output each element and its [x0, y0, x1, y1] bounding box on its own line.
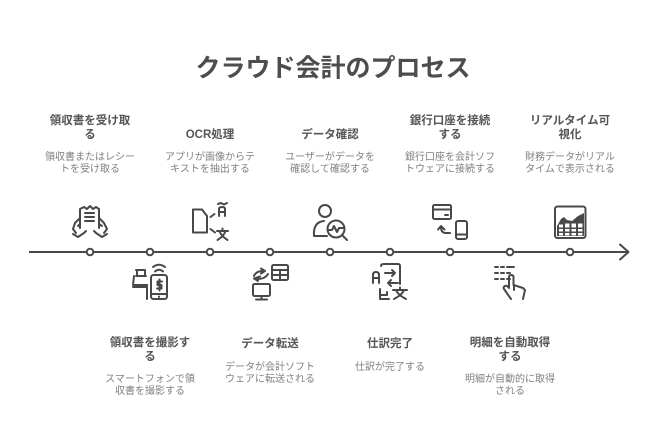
step 6 text: journal completed: 仕訳が完了する: [355, 360, 425, 373]
step 3 text: OCR: アプリが画像からテ: [165, 150, 255, 163]
step 2 text: photograph receipt: 領収書を撮影す: [110, 335, 190, 349]
step 7 text: connect bank account: [405, 113, 495, 175]
step 9 text: real-time visualization: タイムで表示される: [525, 163, 615, 175]
timeline arrow: [29, 244, 628, 260]
step 1 text: receive receipt: る: [84, 128, 96, 141]
icon: journal translation: [373, 264, 407, 299]
step 7 text: connect bank account: 銀行口座を会計ソフ: [405, 150, 495, 163]
icon: hands holding receipt: [73, 206, 107, 237]
icon: pointing hand with list: [495, 267, 525, 299]
step 3 text: OCR: キストを抽出する: [170, 162, 250, 175]
step 2 text: photograph receipt: 収書を撮影する: [115, 384, 185, 397]
icon: data transfer monitor and table: [253, 265, 288, 300]
step 8 text: automatic statement retrieval: される: [495, 385, 525, 397]
step 2 text: photograph receipt: [105, 335, 195, 397]
step 4 text: data transfer: ウェアに転送される: [225, 372, 315, 385]
step 5 text: data confirmation: [285, 127, 375, 175]
step 7 text: connect bank account: 銀行口座を接続: [410, 113, 491, 127]
step 9 text: real-time visualization: 視化: [558, 127, 582, 141]
step 3 text: OCR: OCR処理: [186, 127, 235, 141]
step 8 text: automatic statement retrieval: する: [498, 350, 522, 363]
step 1 text: receive receipt: 領収書またはレシー: [45, 150, 135, 163]
icon: document translation: [193, 203, 228, 240]
step 1 text: receive receipt: 領収書を受け取: [50, 113, 131, 127]
step 9 text: real-time visualization: 財務データがリアル: [525, 150, 615, 163]
step 9 text: real-time visualization: [525, 114, 615, 175]
step 4 text: data transfer: データ転送: [241, 336, 299, 350]
step 8 text: automatic statement retrieval: 明細が自動的に取得: [465, 372, 555, 385]
step 2 text: photograph receipt: スマートフォンで領: [105, 372, 195, 385]
step 5 text: data confirmation: 確認して確認する: [290, 162, 370, 175]
step 5 text: data confirmation: ユーザーがデータを: [285, 150, 375, 163]
step 9 text: real-time visualization: リアルタイム可: [530, 114, 610, 127]
icon: area chart with table: [555, 206, 586, 238]
step 6 text: journal completed: 仕訳完了: [367, 336, 413, 350]
step 4 text: data transfer: データが会計ソフト: [225, 360, 315, 373]
step 7 text: connect bank account: する: [438, 128, 462, 141]
step 1 text: receive receipt: トを受け取る: [60, 163, 120, 175]
step 5 text: data confirmation: データ確認: [301, 127, 359, 141]
step 1 text: receive receipt: [45, 113, 135, 175]
icon: bank card and smartphone: [433, 205, 467, 239]
step 8 text: automatic statement retrieval: [465, 335, 555, 397]
step 8 text: automatic statement retrieval: 明細を自動取得: [470, 335, 550, 349]
step 4 text: data transfer: [225, 336, 315, 385]
title: クラウド会計のプロセス: [195, 54, 471, 82]
step 7 text: connect bank account: トウェアに接続する: [405, 162, 495, 175]
step 2 text: photograph receipt: る: [144, 350, 156, 363]
icon: user with magnifier: [314, 205, 347, 240]
icon: register and smartphone payment: [133, 265, 167, 299]
step 6 text: journal completed: [355, 336, 425, 373]
step 3 text: OCR: [165, 127, 255, 175]
